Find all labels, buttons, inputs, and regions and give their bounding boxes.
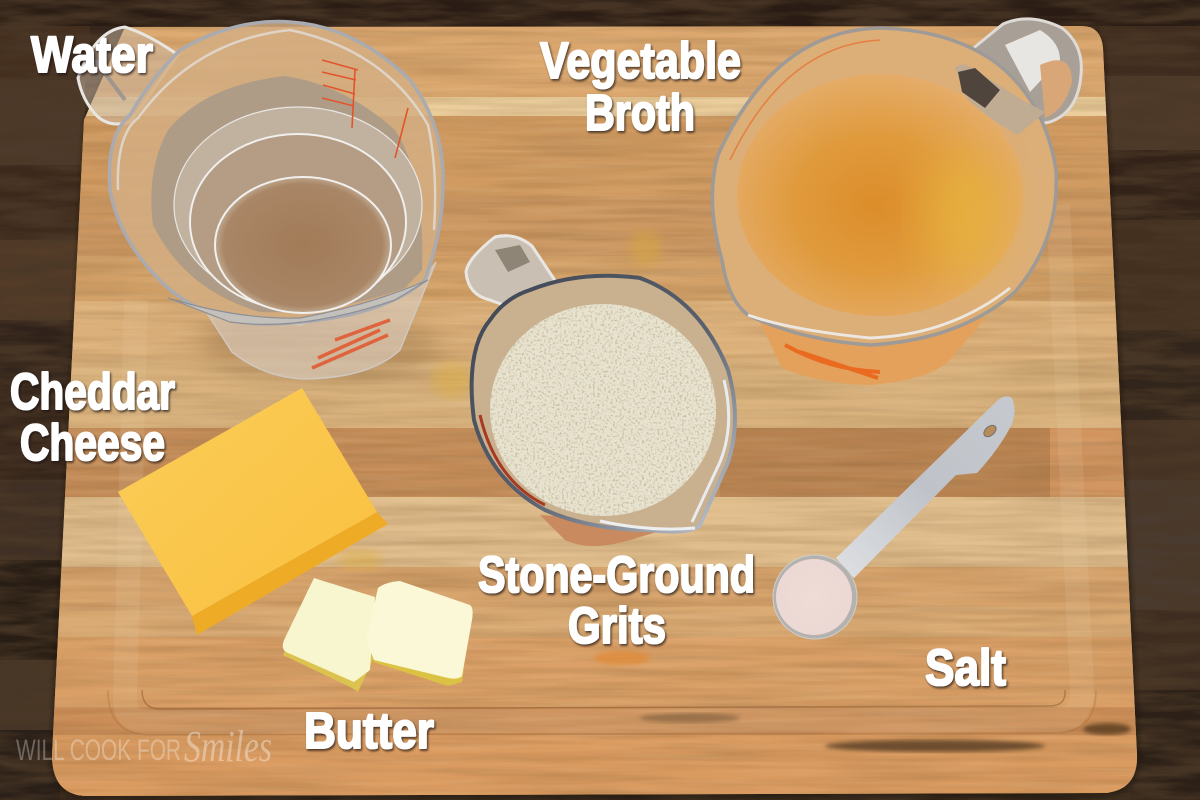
watermark: Smiles	[184, 722, 272, 771]
cup shadow	[200, 307, 440, 383]
rim	[109, 22, 443, 324]
watermark	[16, 722, 272, 771]
red pyrex logo	[312, 320, 390, 368]
handle	[466, 236, 556, 310]
handle root reflection	[955, 64, 1045, 135]
red pyrex logo	[785, 345, 880, 378]
label: Salt: Salt	[925, 639, 1006, 696]
red measuring marks	[322, 60, 408, 158]
water surface	[151, 76, 422, 312]
icon: block of cheddar cheese	[118, 388, 388, 635]
icon: measuring spoon of salt	[773, 396, 1014, 639]
juice groove	[125, 205, 1082, 722]
bowl	[773, 555, 857, 639]
rim	[712, 28, 1056, 345]
glass body	[205, 262, 436, 379]
handle	[965, 19, 1081, 126]
spout glass edge	[168, 280, 428, 324]
label: Stone-Ground Grits: Grits	[568, 597, 666, 654]
label: Vegetable Broth: Broth	[585, 84, 695, 141]
dark knots	[825, 740, 1045, 752]
glass body with broth	[758, 318, 985, 385]
handle hole	[982, 423, 998, 439]
left butter pat	[283, 578, 375, 692]
watermark: WILL COOK FOR	[16, 734, 181, 767]
cup body	[540, 515, 680, 546]
salt	[776, 559, 852, 635]
handle	[78, 27, 178, 124]
icon: butter pats	[283, 578, 473, 692]
label: Stone-Ground Grits	[478, 546, 755, 654]
label: Water: Water	[31, 26, 153, 83]
broth yellow glow	[925, 150, 1005, 280]
icon: measuring cup of water	[78, 22, 443, 383]
label: Butter: Butter	[304, 702, 434, 759]
rim	[472, 276, 735, 532]
cheese side	[192, 512, 388, 635]
right butter pat	[366, 581, 473, 686]
broth surface	[737, 74, 1023, 316]
water ring highlights	[174, 107, 422, 303]
cheese top	[118, 388, 377, 616]
icon: measuring cup of stone-ground grits	[466, 236, 735, 546]
spoon handle	[836, 396, 1014, 578]
label: Cheddar Cheese: Cheese	[20, 414, 165, 471]
grits	[490, 304, 716, 516]
label: Vegetable Broth	[540, 32, 741, 141]
label: Cheddar Cheese: Cheddar	[10, 363, 175, 420]
grits speckle	[490, 304, 716, 516]
label: Cheddar Cheese	[10, 363, 175, 471]
icon: measuring cup of vegetable broth	[712, 19, 1081, 385]
label: Vegetable Broth: Vegetable	[540, 32, 741, 89]
label: Stone-Ground Grits: Stone-Ground	[478, 546, 755, 603]
cup base seen through water	[215, 177, 391, 313]
